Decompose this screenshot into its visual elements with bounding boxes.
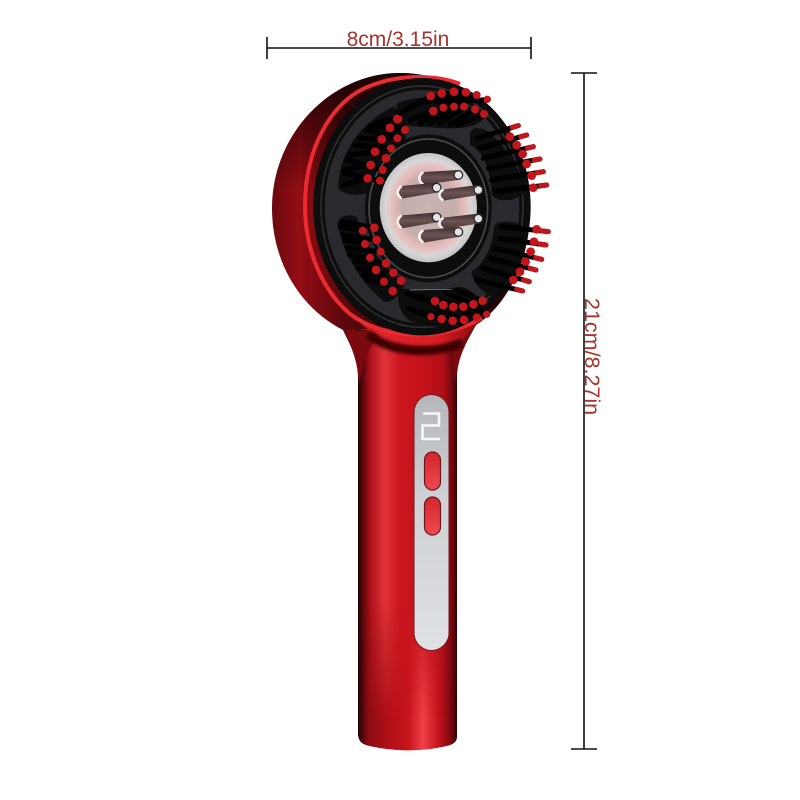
red rim bbox=[305, 77, 482, 335]
pin 4 bbox=[398, 212, 441, 228]
control panel bbox=[414, 394, 450, 651]
bristles: bottom bbox=[407, 289, 490, 325]
bristles: upper right bbox=[477, 126, 547, 192]
black face plate bbox=[313, 78, 531, 335]
neck shadow arc bbox=[368, 334, 462, 351]
brush handle bbox=[343, 323, 476, 750]
button: lower bbox=[424, 497, 440, 535]
width dimension line bbox=[267, 28, 531, 59]
pin 1 bbox=[419, 170, 463, 185]
bristles: upper left bbox=[343, 114, 409, 185]
center ring bbox=[365, 134, 492, 282]
button: upper bbox=[424, 452, 440, 490]
bristle pads bbox=[337, 97, 525, 327]
pin 5 bbox=[439, 214, 483, 229]
pin 2 bbox=[398, 183, 441, 199]
light disk bbox=[380, 153, 477, 262]
brush head face and bristles bbox=[313, 78, 548, 335]
metal pins bbox=[398, 170, 483, 243]
brush head body bbox=[272, 73, 530, 351]
height dimension line bbox=[571, 73, 604, 749]
height label: 21cm/8.27in bbox=[580, 298, 604, 415]
display digit bbox=[422, 414, 440, 439]
bristles: lower left bbox=[340, 222, 405, 295]
bristles: lower right bbox=[477, 225, 548, 291]
bristles: top bbox=[400, 87, 491, 125]
pin 6 bbox=[419, 227, 463, 243]
neck collar bbox=[343, 306, 482, 346]
pin 3 bbox=[439, 185, 483, 201]
width label: 8cm/3.15in bbox=[347, 28, 449, 51]
